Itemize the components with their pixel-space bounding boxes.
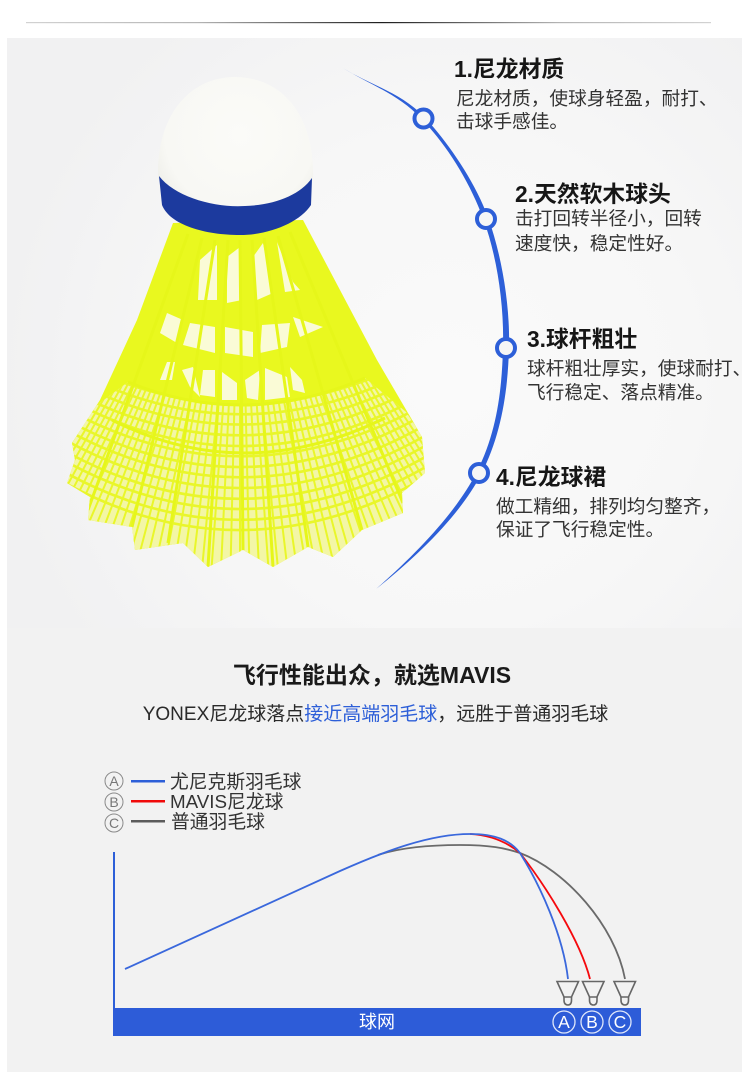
legend item B: MAVIS: MAVIS尼龙球 xyxy=(170,791,284,812)
legend item A: Yonex xyxy=(105,771,302,792)
panel: flight comparison background xyxy=(7,628,742,1072)
net label: 球网 xyxy=(359,1012,395,1032)
landing marker C: C xyxy=(614,1012,626,1032)
shuttle icon A xyxy=(557,982,578,1005)
legend item C: ordinary: 普通羽毛球 xyxy=(171,811,265,832)
heading: 2.天然软木球头 xyxy=(515,181,671,207)
trajectory: Yonex xyxy=(125,834,568,979)
illustration: yellow nylon shuttlecock xyxy=(67,172,425,567)
cork head blue band xyxy=(159,176,312,235)
curved blue arc with feature markers xyxy=(343,68,515,589)
heading: 3.球杆粗壮 xyxy=(527,326,637,352)
trajectory: MAVIS xyxy=(470,834,590,979)
feature 3 text: 飞行稳定、落点精准。 xyxy=(527,382,714,403)
landing marker A: A xyxy=(558,1012,570,1032)
marker 1 xyxy=(414,110,432,128)
panel: product features background xyxy=(7,38,742,628)
heading: 4.尼龙球裙 xyxy=(496,464,606,490)
top divider line xyxy=(26,22,711,23)
section title: 飞行性能出众，就选MAVIS xyxy=(233,662,511,688)
marker 3 xyxy=(497,339,515,357)
description: 做工精细，排列均匀整齐， xyxy=(496,496,720,517)
description: 尼龙材质，使球身轻盈，耐打、 xyxy=(456,88,718,109)
landing marker B xyxy=(581,1011,603,1033)
shuttle icon B xyxy=(582,982,604,1005)
arc xyxy=(343,68,509,589)
shuttle icon C xyxy=(614,982,636,1005)
trajectory chart xyxy=(113,834,641,1036)
upper windows xyxy=(160,242,323,400)
lower mesh xyxy=(67,378,425,567)
feature 2 text: 速度快，稳定性好。 xyxy=(515,233,683,254)
section subtitle: YONEX尼龙球落点接近高端羽毛球，远胜于普通羽毛球 xyxy=(143,703,608,725)
shuttlecock skirt xyxy=(67,220,425,567)
heading: 1.尼龙材质 xyxy=(454,56,564,82)
vertical axis xyxy=(113,852,115,1008)
description: 球杆粗壮厚实，使球耐打、 xyxy=(527,358,750,379)
feature 2 text xyxy=(515,181,702,254)
feature 1 text: 击球手感佳。 xyxy=(456,111,568,132)
legend item B: MAVIS: B xyxy=(109,794,119,810)
marker 2 xyxy=(477,210,495,228)
feature 4 text xyxy=(496,464,720,540)
legend item A: Yonex: A xyxy=(109,773,119,789)
skirt ribs xyxy=(88,232,403,567)
feature 1 text xyxy=(454,56,718,132)
cork head white dome xyxy=(158,77,313,207)
legend item A: Yonex: 尤尼克斯羽毛球 xyxy=(170,771,302,792)
description: 击打回转半径小，回转 xyxy=(515,208,702,229)
trajectory: ordinary shuttle xyxy=(378,845,625,979)
landing marker A xyxy=(553,1011,575,1033)
landing marker C xyxy=(609,1011,631,1033)
feature 3 text xyxy=(527,326,750,403)
feature 4 text: 保证了飞行稳定性。 xyxy=(496,519,664,540)
legend item B: MAVIS xyxy=(105,791,284,812)
marker 4 xyxy=(470,464,488,482)
legend item C: ordinary: C xyxy=(109,815,119,831)
landing marker B: B xyxy=(586,1012,598,1032)
legend xyxy=(105,771,302,832)
legend item C: ordinary xyxy=(105,811,265,832)
net bar xyxy=(113,1008,641,1036)
